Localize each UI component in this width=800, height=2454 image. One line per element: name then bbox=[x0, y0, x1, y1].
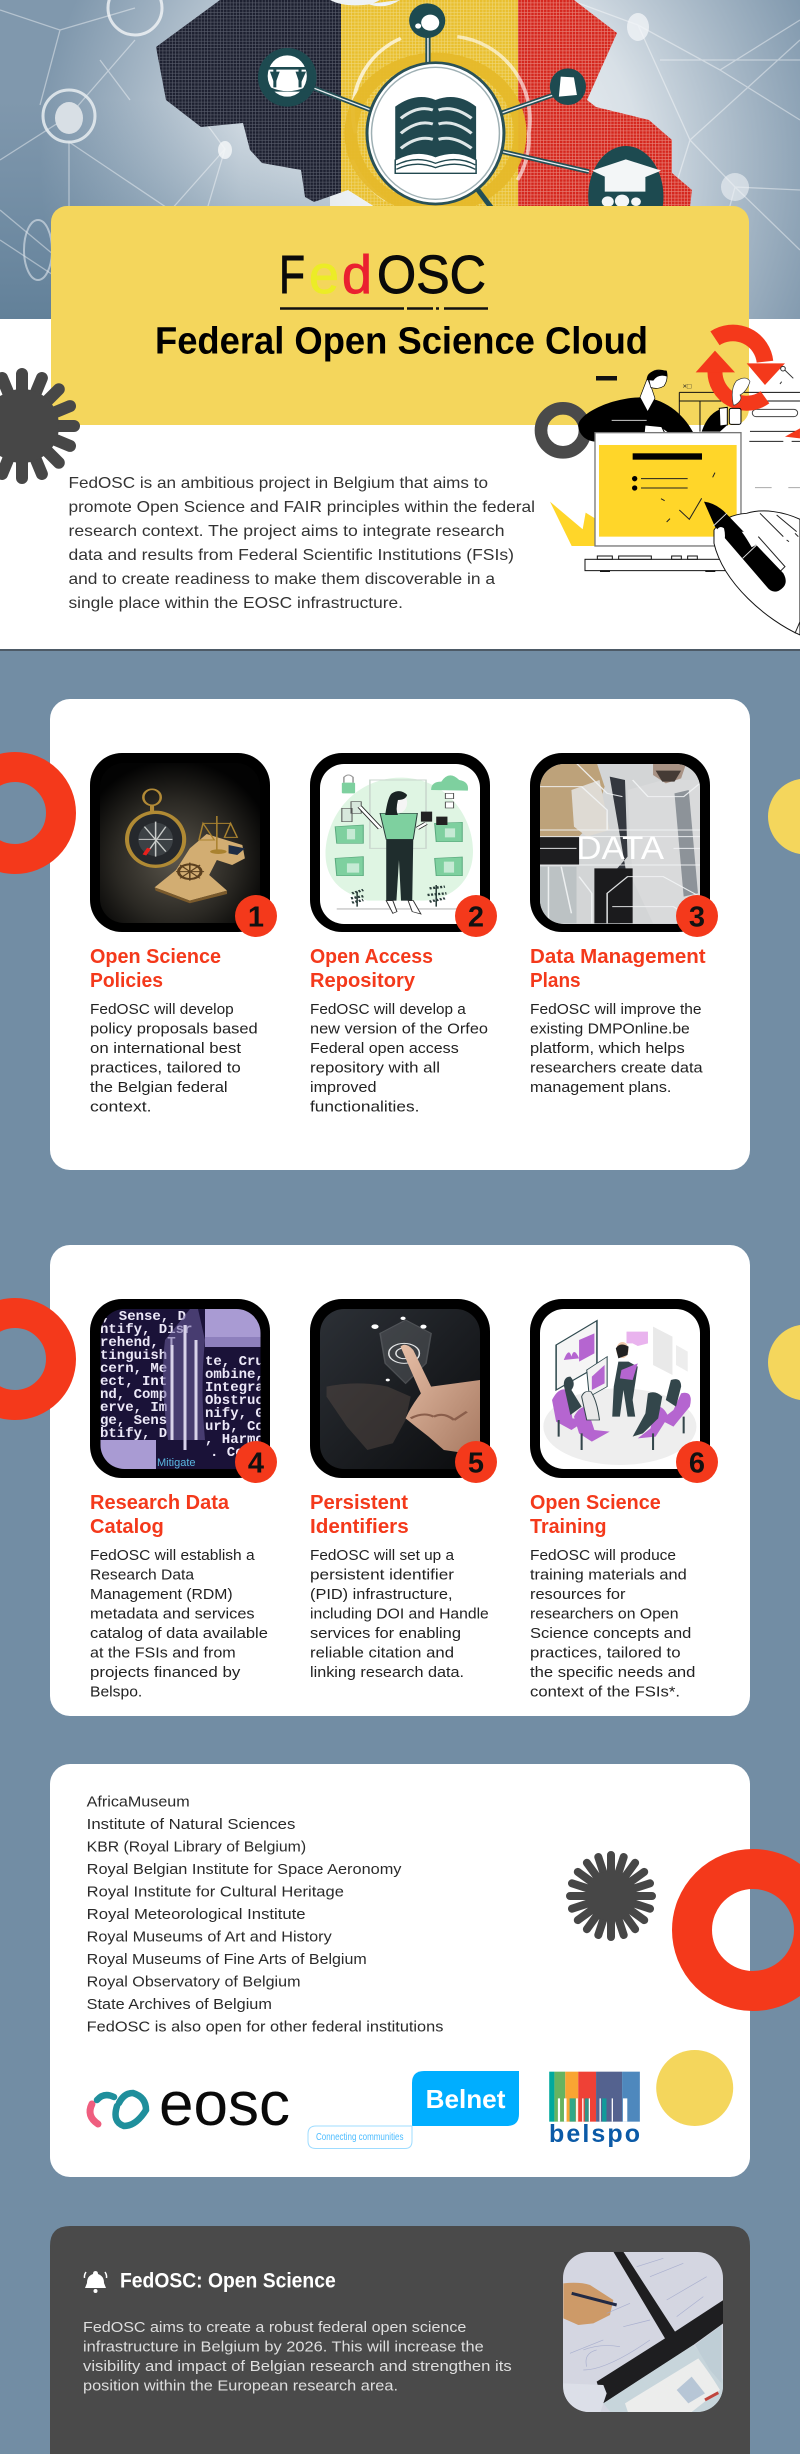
column 2 text: services for enabling bbox=[310, 1625, 461, 1642]
item 3: data management plans: DATA bbox=[576, 830, 665, 866]
column 2 text: persistent identifier bbox=[310, 1566, 454, 1584]
summary text: position within the European research area. bbox=[83, 2378, 398, 2395]
column 3 text: Training bbox=[530, 1516, 607, 1538]
column 3 text bbox=[530, 1492, 695, 1700]
number badges 1 to 3: 2 bbox=[468, 902, 484, 934]
decorative yellow circle bbox=[768, 1324, 800, 1400]
man at laptop bbox=[578, 370, 750, 445]
dark ring bbox=[541, 408, 585, 452]
number badges 4 to 6: 4 bbox=[248, 1448, 264, 1480]
column 1 text: catalog of data available bbox=[90, 1625, 268, 1642]
item 1: open science policies bbox=[90, 753, 270, 932]
photo: glowing text bbox=[100, 1309, 272, 1469]
intro text: single place within the EOSC infrastructure. bbox=[68, 595, 403, 612]
column 3 text: Open Science bbox=[530, 1492, 661, 1514]
column 1 text: FedOSC will establish a bbox=[90, 1547, 255, 1564]
photo: hand writing on paper bbox=[563, 2252, 723, 2413]
photo: glowing text: ect, Int bbox=[100, 1374, 167, 1390]
summary text: FedOSC aims to create a robust federal open science bbox=[83, 2319, 466, 2336]
decorative yellow circle bbox=[768, 778, 800, 854]
heading: FedOSC: Open Science bbox=[120, 2269, 336, 2292]
decorative red ring bbox=[692, 1869, 800, 1991]
institutions list: Royal Museums of Art and History bbox=[87, 1928, 332, 1946]
photo: glowing text: . Coal bbox=[210, 1445, 260, 1461]
photo: people with circuit overlay bbox=[540, 763, 700, 923]
institutions list: Royal Belgian Institute for Space Aeronomy bbox=[87, 1861, 402, 1878]
decorative red ring bbox=[0, 767, 61, 859]
column 3 text: FedOSC will produce bbox=[530, 1547, 676, 1564]
illustration: training group bbox=[543, 1321, 696, 1465]
column 3 text: resources for bbox=[530, 1586, 626, 1603]
photo: glowing text: ge, Sens bbox=[100, 1413, 167, 1429]
photo: glowing text: tinguish bbox=[100, 1348, 167, 1364]
photo: glowing text: cern, Me bbox=[100, 1361, 167, 1377]
photo: glowing text: Mitigate bbox=[157, 1457, 196, 1469]
column 3 text: Science concepts and bbox=[530, 1625, 691, 1642]
summary text: infrastructure in Belgium by 2026. This will increase the bbox=[83, 2339, 484, 2356]
number badges 1 to 3: 3 bbox=[689, 902, 705, 934]
column 1 text: at the FSIs and from bbox=[90, 1644, 236, 1662]
column 1 text: Research Data bbox=[90, 1492, 230, 1514]
photo: glowing text: urb, Con bbox=[205, 1419, 272, 1435]
column 2 text: functionalities. bbox=[310, 1098, 419, 1116]
FedOSC logo bbox=[279, 245, 488, 308]
column 2 text bbox=[310, 1492, 489, 1681]
column 3 text: existing DMPOnline.be bbox=[530, 1020, 690, 1038]
icon: bell bbox=[84, 2271, 107, 2293]
hero banner: Belgium network map bbox=[0, 0, 800, 319]
column 2 text: FedOSC will set up a bbox=[310, 1547, 455, 1564]
intro text: research context. The project aims to integrate research bbox=[68, 523, 504, 540]
column 2 text: repository with all bbox=[310, 1060, 440, 1076]
summary text: visibility and impact of Belgian research and strengthen its bbox=[83, 2358, 512, 2375]
intro text: FedOSC is an ambitious project in Belgium that aims to bbox=[68, 475, 488, 492]
column 2 text: FedOSC will develop a bbox=[310, 1001, 466, 1018]
column 2 text: Identifiers bbox=[310, 1516, 409, 1538]
icon: lightbulb node bbox=[409, 3, 445, 38]
panel: services 4 to 6 bbox=[0, 1245, 800, 1716]
column 3 text: training materials and bbox=[530, 1566, 687, 1584]
photo: glowing text: , Sense, D bbox=[102, 1309, 186, 1325]
item 6: open science training bbox=[530, 1299, 710, 1478]
institutions list: Royal Institute for Cultural Heritage bbox=[87, 1884, 344, 1900]
photo: compass and puzzle bbox=[125, 789, 245, 903]
number badges 1 to 3: 1 bbox=[248, 902, 264, 934]
laptop bbox=[585, 433, 741, 572]
institutions list: KBR (Royal Library of Belgium) bbox=[87, 1838, 306, 1856]
number badges 4 to 6: 5 bbox=[468, 1448, 484, 1480]
decorative gear bbox=[570, 1855, 652, 1937]
column 1 text: projects financed by bbox=[90, 1664, 241, 1681]
photo: glowing text: nify, Gr bbox=[205, 1406, 272, 1422]
icon: red refresh arrows bbox=[696, 333, 800, 438]
icon: flask node bbox=[550, 68, 586, 105]
photo: glowing text: Integra bbox=[205, 1380, 264, 1396]
institutions list bbox=[87, 1794, 443, 2036]
column 1 text: context. bbox=[90, 1098, 152, 1116]
logo: EOSC bbox=[90, 2070, 290, 2139]
column 1 text bbox=[90, 1492, 268, 1700]
column 1 text: metadata and services bbox=[90, 1606, 255, 1622]
photo: glowing text: nd, Comp bbox=[100, 1387, 167, 1403]
title: Federal Open Science Cloud bbox=[155, 320, 648, 362]
title panel bbox=[51, 206, 749, 425]
network diagram: book and linked icons bbox=[258, 3, 664, 206]
photo: glowing text: Obstruc bbox=[205, 1393, 264, 1409]
institutions list: FedOSC is also open for other federal institutions bbox=[87, 2018, 443, 2036]
illustration: man, laptop, hand and marker: ×□ bbox=[683, 382, 692, 391]
item 5: persistent identifiers bbox=[310, 1299, 490, 1478]
column 1 text: on international best bbox=[90, 1040, 242, 1057]
photo: glowing text: ntify, Disr bbox=[100, 1322, 192, 1338]
intro text: data and results from Federal Scientific Institutions (FSIs) bbox=[68, 547, 514, 564]
decorative yellow circle bbox=[656, 2050, 733, 2126]
number badges 4 to 6: 6 bbox=[689, 1448, 705, 1480]
column 1 text: practices, tailored to bbox=[90, 1060, 241, 1076]
column 3 text: the specific needs and bbox=[530, 1664, 695, 1681]
intro text: promote Open Science and FAIR principles within the federal bbox=[68, 499, 535, 516]
logo: EOSC: eosc bbox=[159, 2070, 290, 2139]
logo: Belnet: Connecting communities bbox=[316, 2132, 404, 2143]
illustration: woman with folders bbox=[326, 775, 473, 914]
photo: glowing text: , Harmon bbox=[205, 1432, 272, 1448]
photo: finger touching shield bbox=[327, 1317, 480, 1453]
panel: services 1 to 3 bbox=[0, 699, 800, 1170]
photo: glowing text: erve, Im bbox=[100, 1400, 167, 1416]
institutions list: State Archives of Belgium bbox=[87, 1996, 272, 2013]
yellow burst bbox=[550, 502, 595, 546]
decorative red ring bbox=[0, 1313, 61, 1405]
FedOSC logo: OSC bbox=[377, 245, 486, 305]
institutions list: Royal Museums of Fine Arts of Belgium bbox=[87, 1951, 367, 1968]
item 3: data management plans bbox=[530, 753, 710, 932]
column 3 text: context of the FSIs*. bbox=[530, 1684, 680, 1700]
institutions list: Institute of Natural Sciences bbox=[87, 1816, 295, 1833]
column 2 text: reliable citation and bbox=[310, 1644, 454, 1662]
column 3 text bbox=[530, 946, 706, 1096]
column 2 text: Open Access bbox=[310, 946, 433, 968]
column 1 text: the Belgian federal bbox=[90, 1079, 228, 1096]
FedOSC logo: d bbox=[342, 245, 372, 305]
FedOSC logo: F bbox=[279, 245, 305, 305]
column 1 text: policy proposals based bbox=[90, 1020, 258, 1038]
photo: glowing text: te, Cru bbox=[205, 1354, 264, 1370]
column 3 text: researchers create data bbox=[530, 1060, 703, 1076]
column 1 text: Research Data bbox=[90, 1566, 195, 1584]
FedOSC logo: e bbox=[309, 245, 339, 305]
logo text: belspo: belspo bbox=[549, 2120, 640, 2148]
column 2 text: improved bbox=[310, 1079, 376, 1096]
icon: open book bbox=[395, 97, 476, 173]
summary text bbox=[83, 2319, 512, 2395]
column 1 text: FedOSC will develop bbox=[90, 1001, 234, 1018]
column 3 text: Data Management bbox=[530, 946, 706, 968]
number badges 4 to 6 bbox=[235, 1441, 718, 1483]
icon: scales node bbox=[258, 48, 317, 107]
column 2 text: (PID) infrastructure, bbox=[310, 1586, 452, 1603]
column 2 text: new version of the Orfeo bbox=[310, 1020, 488, 1038]
white intro band bbox=[0, 319, 800, 650]
column 1 text: Policies bbox=[90, 970, 163, 992]
column 3 text: researchers on Open bbox=[530, 1606, 679, 1622]
intro text: and to create readiness to make them discoverable in a bbox=[68, 571, 495, 588]
column 1 text bbox=[90, 946, 258, 1116]
photo: glowing text: ombine, bbox=[205, 1367, 264, 1383]
institutions list: AfricaMuseum bbox=[87, 1794, 190, 1810]
item 2: open access repository bbox=[310, 753, 490, 932]
column 2 text: Repository bbox=[310, 970, 416, 992]
icon: graduation cap node bbox=[588, 146, 664, 206]
column 1 text: Open Science bbox=[90, 946, 221, 968]
column 3 text: platform, which helps bbox=[530, 1040, 685, 1057]
intro text bbox=[68, 475, 535, 612]
logo: Belnet bbox=[308, 2071, 519, 2148]
institutions list: Royal Meteorological Institute bbox=[87, 1906, 306, 1923]
institutions list: Royal Observatory of Belgium bbox=[87, 1974, 300, 1990]
column 1 text: Management (RDM) bbox=[90, 1586, 233, 1603]
photo: glowing text: btify, D bbox=[100, 1426, 167, 1442]
column 3 text: management plans. bbox=[530, 1079, 671, 1096]
column 2 text: including DOI and Handle bbox=[310, 1606, 489, 1622]
column 2 text: Federal open access bbox=[310, 1040, 459, 1057]
panel: institutions and partner logos bbox=[50, 1764, 800, 2177]
decorative gear, top left bbox=[0, 374, 74, 478]
column 2 text: linking research data. bbox=[310, 1664, 464, 1681]
logo: Belnet: Belnet bbox=[426, 2084, 506, 2114]
illustration: man, laptop, hand and marker bbox=[541, 333, 800, 635]
column 2 text: Persistent bbox=[310, 1492, 408, 1514]
column 1 text: Belspo. bbox=[90, 1684, 142, 1700]
column 3 text: Plans bbox=[530, 970, 581, 992]
hand with marker bbox=[704, 502, 800, 635]
column 3 text: FedOSC will improve the bbox=[530, 1001, 702, 1018]
panel: FedOSC Open Science summary bbox=[50, 2226, 750, 2454]
number badges 1 to 3 bbox=[235, 895, 718, 937]
column 1 text: Catalog bbox=[90, 1516, 164, 1538]
logo: belspo bbox=[549, 2072, 640, 2122]
column 2 text bbox=[310, 946, 488, 1116]
item 4: research data catalog bbox=[90, 1299, 272, 1478]
column 3 text: practices, tailored to bbox=[530, 1644, 681, 1662]
photo: glowing text: rehend, T bbox=[100, 1335, 176, 1351]
